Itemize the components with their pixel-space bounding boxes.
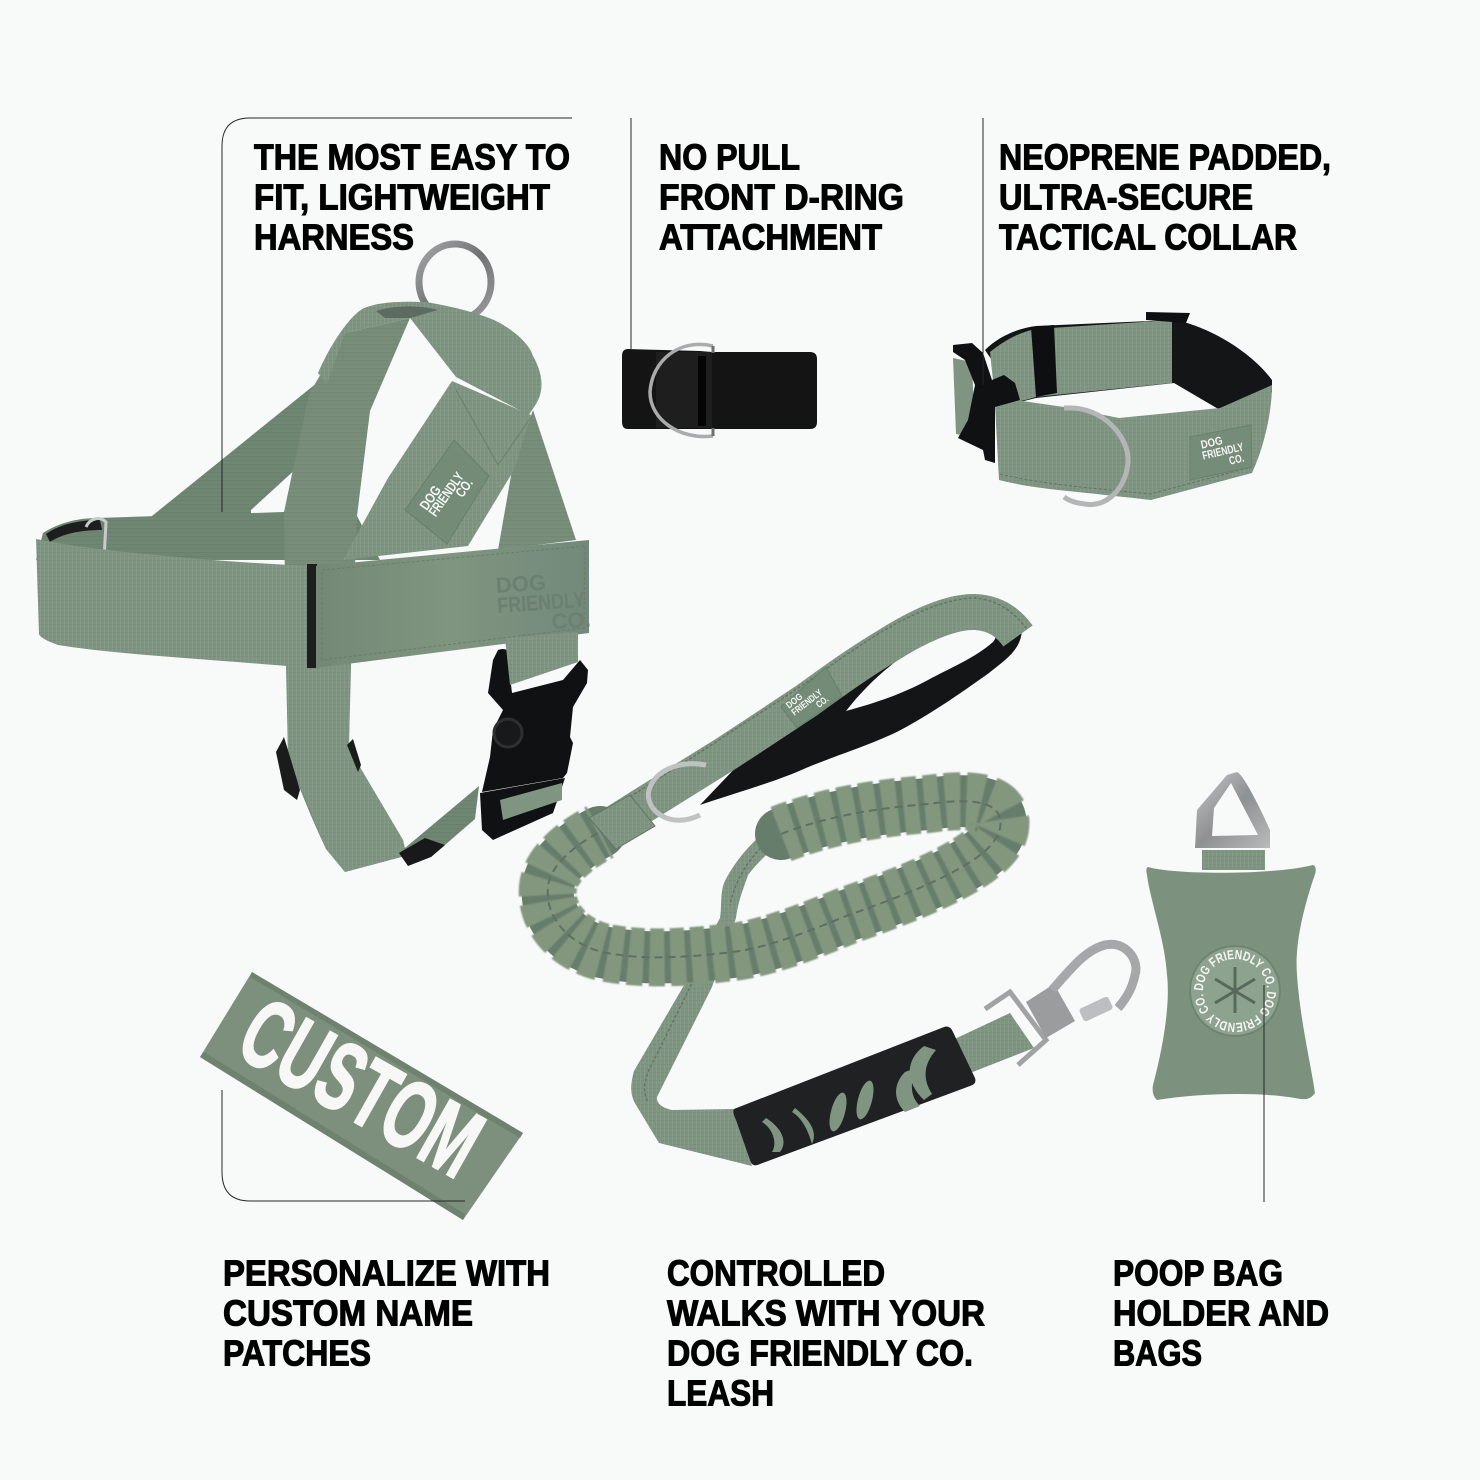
- product: no pull D-ring attachment: [622, 344, 817, 437]
- product: custom name patch: [200, 972, 523, 1220]
- product: poop bag holder: [1146, 772, 1316, 1100]
- snap hook: [985, 944, 1136, 1065]
- buckle upper webbing: [505, 632, 578, 685]
- text: collar: [999, 136, 1331, 258]
- text: no pull: ATTACHMENT: [659, 216, 882, 258]
- collar neoprene back: [985, 320, 1272, 410]
- velcro tab: [622, 349, 817, 429]
- collar logo patch: FRIENDLY: [1201, 441, 1245, 463]
- handle logo patch: FRIENDLY: [790, 687, 825, 718]
- padded belt panel: CO.: [551, 607, 591, 634]
- carabiner: [1195, 772, 1270, 848]
- text: harness: THE MOST EASY TO: [254, 136, 570, 178]
- text: poop bag: BAGS: [1113, 1332, 1202, 1374]
- collar front band: [995, 385, 1272, 500]
- text: poop bag: HOLDER AND: [1113, 1292, 1329, 1334]
- handle logo patch: CO.: [814, 694, 831, 711]
- front vertical strap: [284, 318, 410, 872]
- text: harness: HARNESS: [254, 216, 414, 258]
- padded belt panel: DOG: [495, 570, 547, 598]
- text: collar: TACTICAL COLLAR: [999, 216, 1297, 258]
- collar black keeper: [1031, 325, 1057, 397]
- product: tactical collar: [953, 312, 1272, 505]
- harness logo patch: FRIENDLY: [425, 469, 467, 519]
- leader line: poop bag: [1263, 985, 1265, 1202]
- text: poop bag: [1113, 1252, 1329, 1374]
- leash handle strap: [604, 612, 1018, 830]
- leader line: harness: [222, 118, 572, 512]
- collar logo patch: DOG: [1200, 435, 1224, 452]
- collar logo patch: CO.: [1228, 453, 1245, 468]
- product: leash: [548, 598, 1136, 1166]
- hook strap: [944, 1013, 1034, 1075]
- buckle: [480, 632, 588, 840]
- front patch strap: [343, 381, 531, 560]
- inner belt: [36, 512, 380, 560]
- handle opening: [846, 627, 996, 711]
- collar buckle: [953, 343, 1020, 463]
- harness D-ring: [419, 244, 491, 320]
- harness logo patch: DOG: [416, 482, 444, 513]
- text: leash: [667, 1252, 985, 1414]
- leader line: front D-ring: [630, 118, 632, 349]
- bag body: [1146, 865, 1316, 1100]
- text: poop bag: POOP BAG: [1113, 1252, 1283, 1294]
- harness logo patch: CO.: [452, 475, 476, 500]
- harness logo patch: [405, 440, 489, 544]
- leader line: patches: [222, 1090, 465, 1201]
- text: no pull: NO PULL: [659, 136, 800, 178]
- text: no pull: [659, 136, 904, 258]
- collar logo patch: [1190, 425, 1252, 480]
- handle end tab: [589, 795, 655, 849]
- text: patches: PATCHES: [223, 1332, 371, 1374]
- handle logo patch: DOG: [784, 691, 805, 711]
- black grip: [733, 1027, 975, 1165]
- belly strap to buckle: [399, 786, 479, 857]
- product: harness: [36, 244, 591, 872]
- velcro edge: [307, 564, 317, 668]
- collar left tab: [953, 358, 975, 437]
- text: leash: LEASH: [667, 1372, 774, 1414]
- bungee section: [548, 801, 1000, 957]
- metal D-ring: [650, 344, 713, 437]
- handle D-ring: [648, 764, 706, 820]
- collar D-ring: [1064, 408, 1128, 505]
- front belt: [36, 539, 311, 668]
- text: no pull: FRONT D-RING: [659, 176, 904, 218]
- back diagonal strap: [152, 382, 322, 530]
- text: collar: NEOPRENE PADDED,: [999, 136, 1331, 178]
- text: harness: [254, 136, 570, 258]
- shoulder fold: [318, 302, 542, 415]
- right shoulder strap: [498, 410, 576, 550]
- buckle lower webbing: [500, 783, 562, 820]
- product: custom name patch: CUSTOM: [222, 976, 500, 1198]
- handle logo patch: [781, 667, 842, 728]
- lower leash strap: [631, 826, 781, 1166]
- text: leash: WALKS WITH YOUR: [667, 1292, 985, 1334]
- leader line: collar: [982, 118, 984, 385]
- text: harness: FIT, LIGHTWEIGHT: [254, 176, 550, 218]
- text: collar: ULTRA-SECURE: [999, 176, 1253, 218]
- holder webbing: [1202, 850, 1265, 870]
- padded belt panel: FRIENDLY: [496, 587, 586, 618]
- text: leash: CONTROLLED: [667, 1252, 885, 1294]
- bag badge: DOG FRIENDLY CO. DOG FRIENDLY CO.: [1194, 950, 1276, 1032]
- text: patches: PERSONALIZE WITH: [223, 1252, 550, 1294]
- text: leash: DOG FRIENDLY CO.: [667, 1332, 973, 1374]
- text: patches: CUSTOM NAME: [223, 1292, 473, 1334]
- padded belt panel: [316, 540, 591, 668]
- left slider: [276, 737, 300, 800]
- collar inner band: [990, 320, 1172, 403]
- leash handle lining: [700, 606, 1022, 805]
- text: patches: [223, 1252, 550, 1374]
- belt ring: [86, 519, 106, 560]
